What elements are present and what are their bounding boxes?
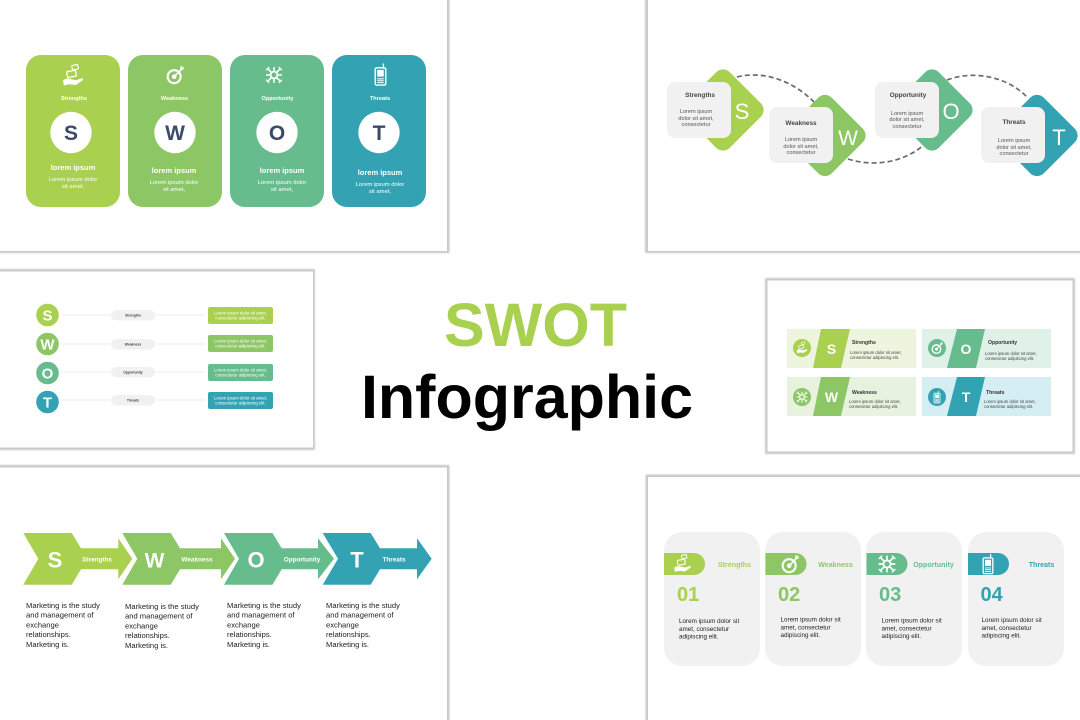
step: opportunity: dolor sit amet,	[889, 117, 925, 123]
arrow: strengths: Strengths	[82, 556, 112, 564]
arrow: threats	[323, 533, 432, 649]
title: Infographic	[361, 363, 693, 431]
tile: strengths: consectetur adipiscing elit.	[850, 355, 899, 360]
panel: card style SWOT	[0, 0, 450, 253]
row: threats: Threats	[127, 398, 139, 402]
step: weakness: W	[838, 127, 858, 150]
row: threats: Lorem ipsum dolor sit amet,	[214, 396, 267, 400]
row: weakness: Lorem ipsum dolor sit amet,	[214, 338, 267, 344]
row: strengths	[36, 304, 273, 326]
card: threats: Threats	[370, 96, 390, 102]
card: 04 threats: Threats	[1029, 561, 1054, 569]
row: opportunity: O	[42, 366, 54, 382]
step: threats: T	[1052, 125, 1066, 150]
card: 02 weakness: 02	[778, 584, 800, 606]
card: weakness: sit amet,	[163, 187, 185, 193]
step: opportunity: Opportunity	[890, 92, 927, 99]
card: 03 opportunity: Opportunity	[913, 561, 954, 569]
card: 03 opportunity: 03	[879, 584, 901, 606]
arrow: weakness: Weakness	[181, 556, 213, 564]
row: weakness	[36, 333, 273, 355]
card: 02 weakness: Lorem ipsum dolor sit	[780, 616, 841, 624]
card: opportunity	[230, 55, 324, 207]
arrow: opportunity: exchange	[227, 620, 260, 629]
tile: threats: Lorem ipsum dolor sit amet,	[984, 399, 1036, 404]
card: weakness: lorem ipsum	[152, 166, 197, 175]
tile: strengths: S	[827, 341, 836, 357]
card: 01 strengths: amet, consectetur	[679, 626, 729, 633]
title	[361, 291, 693, 431]
title: SWOT	[444, 291, 627, 359]
card: 04 threats: amet, consectetur	[982, 625, 1032, 632]
row: strengths: Lorem ipsum dolor sit amet,	[214, 310, 267, 316]
card: strengths: lorem ipsum	[51, 163, 96, 172]
step: weakness: Weakness	[785, 120, 817, 127]
tile: opportunity: Lorem ipsum dolor sit amet,	[985, 351, 1037, 356]
tile: opportunity: consectetur adipiscing elit.	[985, 356, 1034, 361]
tile: strengths	[787, 329, 916, 368]
card: weakness: W	[165, 122, 185, 145]
card: 04 threats: 04	[980, 584, 1004, 606]
arrow: strengths: Marketing is.	[26, 640, 69, 649]
arrow: weakness: exchange	[125, 621, 158, 630]
panel: parallelogram grid SWOT	[765, 278, 1075, 454]
step: weakness: Lorem ipsum	[785, 137, 817, 143]
card: 01 strengths: adipiscing elit.	[679, 634, 719, 640]
arrow: threats: and management of	[326, 611, 394, 620]
card: 04 threats: Lorem ipsum dolor sit	[982, 617, 1042, 624]
card: threats: Lorem ipsum dolor	[356, 182, 404, 188]
card: 01 strengths: Strengths	[718, 561, 751, 569]
step: strengths: dolor sit amet,	[678, 116, 714, 122]
panel: numbered cards SWOT	[646, 474, 1080, 720]
arrow: weakness: W	[145, 550, 165, 572]
tile: weakness: Lorem ipsum dolor sit amet,	[849, 399, 901, 404]
step: weakness	[769, 91, 870, 180]
row: weakness: consectetur adipiscing elit.	[215, 344, 266, 348]
card: 03 opportunity	[866, 532, 962, 666]
arrow: threats: T	[350, 548, 364, 572]
row: weakness: W	[40, 336, 55, 354]
arrow: opportunity: Opportunity	[284, 556, 321, 564]
card: 03 opportunity: amet, consectetur	[882, 626, 932, 632]
card: 02 weakness: amet, consectetur	[780, 624, 831, 632]
row: threats: T	[43, 394, 52, 412]
tile: weakness: Weakness	[852, 390, 877, 396]
card: strengths: Lorem ipsum dolor	[49, 177, 97, 183]
card: opportunity: lorem ipsum	[260, 166, 305, 175]
step: weakness: dolor sit amet,	[783, 144, 819, 150]
row: opportunity: consectetur adipiscing elit.	[215, 372, 266, 378]
tile: strengths: Strengths	[852, 340, 876, 346]
card: weakness	[128, 55, 222, 207]
step: threats: dolor sit amet,	[996, 145, 1032, 151]
arrow: opportunity: relationships.	[227, 630, 272, 639]
arrow: opportunity: O	[247, 548, 265, 572]
arrow: threats: relationships.	[326, 630, 371, 639]
card: opportunity: sit amet,	[271, 187, 293, 193]
step: strengths: Lorem ipsum	[680, 109, 712, 115]
card: threats: lorem ipsum	[358, 168, 403, 177]
arrow: opportunity: Marketing is the study	[227, 601, 301, 610]
arrow: strengths: and management of	[26, 611, 94, 620]
step: threats: consectetur	[1000, 151, 1029, 157]
card: threats	[332, 55, 426, 207]
card: strengths: S	[64, 122, 78, 145]
row: opportunity	[36, 362, 273, 384]
arrow: strengths: exchange	[26, 620, 59, 629]
step: strengths: Strengths	[685, 92, 715, 99]
tile: opportunity: Opportunity	[988, 340, 1017, 346]
card: 01 strengths	[664, 532, 760, 666]
step: opportunity: consectetur	[893, 124, 922, 130]
dashed connector arcs	[737, 75, 1028, 163]
arrow: weakness: relationships.	[125, 631, 170, 640]
card: threats: T	[373, 122, 386, 145]
card: strengths: Strengths	[61, 96, 87, 102]
card: 03 opportunity: adipiscing elit.	[882, 633, 921, 640]
step: strengths	[667, 65, 768, 155]
arrow: strengths	[23, 533, 132, 649]
tile: opportunity: O	[961, 341, 972, 357]
tile: opportunity	[922, 329, 1051, 368]
tile: threats: Threats	[986, 390, 1005, 396]
card: weakness: Lorem ipsum dolor	[150, 180, 198, 186]
card: threats: sit amet,	[369, 189, 391, 195]
row: threats: consectetur adipiscing elit.	[215, 400, 266, 406]
row: strengths: S	[42, 308, 53, 324]
step: weakness: consectetur	[787, 150, 816, 156]
arrow: strengths: S	[48, 548, 62, 572]
card: opportunity: O	[269, 122, 285, 145]
tile: threats	[922, 377, 1051, 416]
step: opportunity	[875, 65, 977, 155]
card: strengths: sit amet,	[62, 184, 84, 190]
arrow: threats: Threats	[382, 556, 406, 564]
arrow: threats: Marketing is the study	[326, 601, 400, 610]
panel: diamond flow SWOT	[645, 0, 1080, 253]
arrow: weakness	[122, 533, 235, 650]
row: threats	[36, 391, 273, 413]
arrow: opportunity	[224, 533, 334, 649]
arrow: threats: Marketing is.	[326, 640, 369, 649]
tile: threats: consectetur adipiscing elit.	[984, 404, 1033, 409]
card: 04 threats: adipiscing elit.	[982, 632, 1021, 640]
card: opportunity: Opportunity	[261, 96, 294, 102]
row: strengths: consectetur adipiscing elit.	[215, 316, 266, 320]
card: 02 weakness: adipiscing elit.	[780, 632, 820, 639]
card: opportunity: Lorem ipsum dolor	[258, 180, 306, 186]
tile: weakness: consectetur adipiscing elit.	[849, 404, 898, 409]
arrow: threats: exchange	[326, 620, 359, 629]
step: opportunity: Lorem ipsum	[891, 111, 923, 117]
arrow: weakness: Marketing is the study	[125, 602, 199, 611]
card: 02 weakness: Weakness	[818, 561, 853, 569]
row: opportunity: Lorem ipsum dolor sit amet,	[214, 368, 267, 372]
arrow: strengths: relationships.	[26, 630, 71, 639]
panel: timeline rows SWOT	[0, 269, 315, 450]
arrow: weakness: Marketing is.	[125, 641, 168, 650]
arrow: strengths: Marketing is the study	[26, 601, 100, 610]
step: strengths: consectetur	[682, 122, 711, 128]
row: opportunity: Opportunity	[123, 370, 143, 374]
tile: strengths: Lorem ipsum dolor sit amet,	[850, 350, 902, 355]
row: weakness: Weakness	[125, 342, 141, 346]
card: 02 weakness	[765, 532, 861, 666]
tile: weakness: W	[825, 389, 839, 405]
card: 03 opportunity: Lorem ipsum dolor sit	[882, 618, 942, 624]
step: threats: Lorem ipsum	[998, 138, 1030, 144]
panel: arrow chain SWOT	[0, 465, 450, 720]
card: strengths	[26, 55, 120, 207]
card: 04 threats	[968, 532, 1064, 666]
arrow: weakness: and management of	[125, 612, 193, 621]
card: 01 strengths: 01	[677, 584, 699, 606]
step: opportunity: O	[942, 99, 960, 124]
tile: threats: T	[962, 389, 971, 405]
step: threats	[981, 91, 1080, 180]
step: threats: Threats	[1002, 119, 1026, 126]
card: weakness: Weakness	[161, 96, 188, 102]
step: strengths: S	[735, 99, 749, 124]
card: 01 strengths: Lorem ipsum dolor sit	[679, 618, 739, 625]
arrow: opportunity: and management of	[227, 611, 295, 620]
row: strengths: Strengths	[125, 314, 141, 318]
arrow: opportunity: Marketing is.	[227, 640, 270, 649]
tile: weakness	[787, 377, 916, 416]
